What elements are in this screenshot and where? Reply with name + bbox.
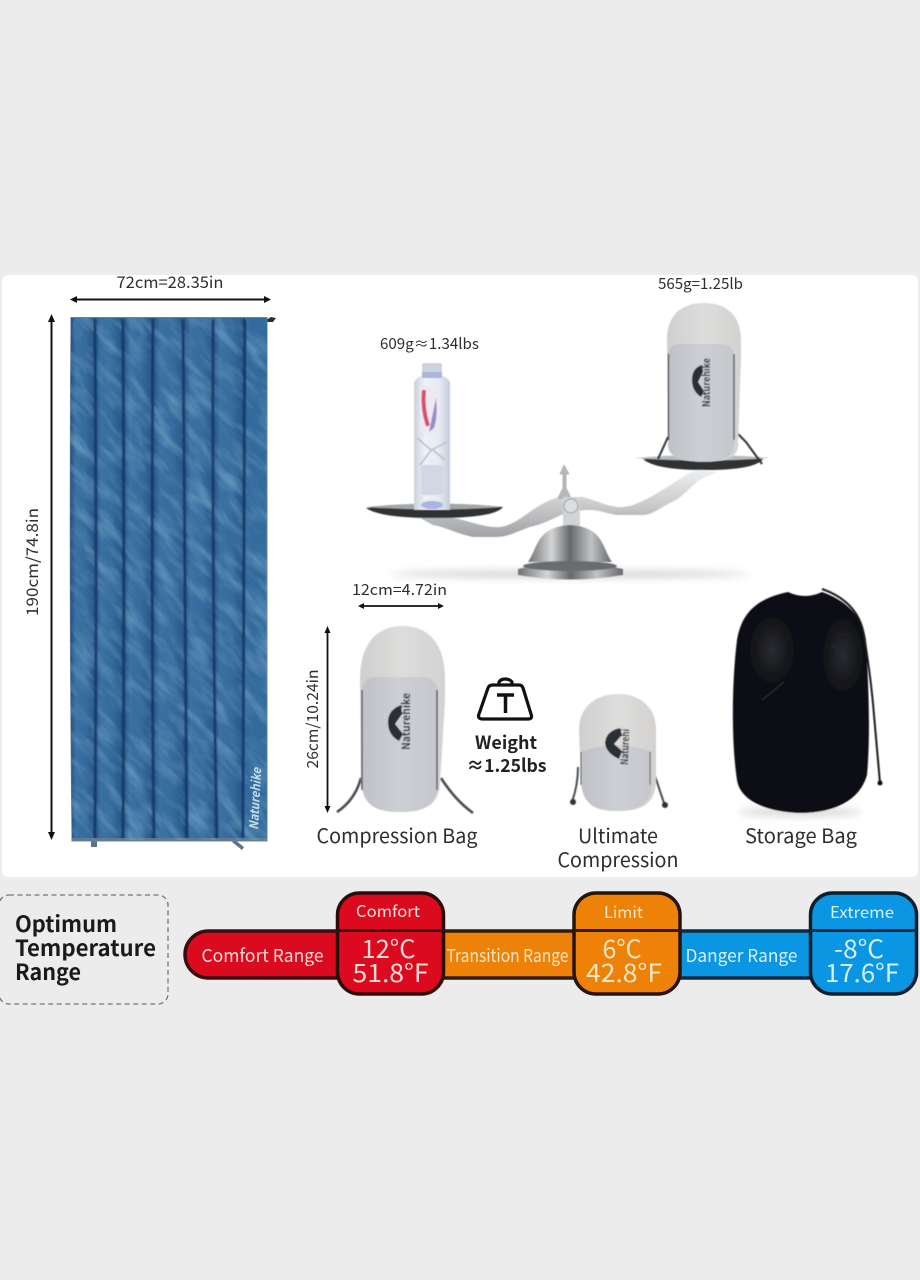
label: bag weight: 565g=1.25lb bbox=[658, 273, 743, 294]
weight text: ≈1.25lbs bbox=[466, 752, 547, 778]
pillow pocket bbox=[73, 321, 83, 341]
weight text: Weight bbox=[475, 729, 537, 755]
panel: optimum temperature heading: Optimum bbox=[15, 907, 117, 939]
brand logo bbox=[692, 358, 714, 407]
comfort range bar: Comfort Range bbox=[202, 942, 324, 968]
pointer bbox=[558, 465, 571, 498]
comfort box bbox=[337, 893, 444, 994]
storage bag bbox=[733, 589, 882, 817]
seams bbox=[95, 320, 245, 838]
temperature range chart bbox=[185, 893, 917, 994]
extreme box: Extreme bbox=[830, 899, 894, 923]
weight text bbox=[466, 729, 547, 778]
stuff sack on scale bbox=[658, 303, 762, 464]
transition range bar bbox=[440, 931, 576, 978]
extreme box: 17.6°F bbox=[825, 954, 899, 990]
brand logo bbox=[388, 693, 414, 750]
label: compressed height: 26cm/10.24in bbox=[301, 670, 323, 768]
limit box: 42.8°F bbox=[586, 954, 662, 990]
limit box: 6°C bbox=[602, 930, 642, 966]
left plate bbox=[366, 504, 503, 518]
transition range bar: Transition Range bbox=[446, 942, 569, 968]
panel: optimum temperature heading: Temperature bbox=[15, 931, 156, 963]
limit box: Limit bbox=[604, 899, 643, 923]
label: ultimate compression: Compression bbox=[558, 844, 678, 873]
bell stand bbox=[563, 497, 580, 530]
height dimension: sleeping bag: 190cm/74.8in bbox=[19, 508, 43, 616]
label: compressed width bbox=[352, 579, 447, 609]
brand logo: Naturehike bbox=[699, 358, 714, 407]
brand text on bag: Naturehike bbox=[243, 766, 265, 830]
label: storage bag: Storage Bag bbox=[745, 820, 857, 849]
comfort box: 51.8°F bbox=[352, 954, 429, 990]
extreme box bbox=[810, 893, 917, 994]
brand logo: Naturehike bbox=[398, 693, 414, 750]
width dimension: sleeping bag bbox=[70, 269, 271, 303]
balance scale bbox=[366, 455, 770, 580]
label: compressed width: 12cm=4.72in bbox=[352, 579, 447, 600]
brand logo: Naturehi bbox=[617, 729, 633, 765]
danger range bar bbox=[678, 931, 812, 978]
limit box bbox=[574, 893, 681, 994]
label: ultimate compression: Ultimate bbox=[578, 820, 658, 849]
height dimension: sleeping bag bbox=[19, 314, 55, 840]
label: compression bag: Compression Bag bbox=[316, 820, 478, 849]
panel: optimum temperature heading: Range bbox=[15, 955, 81, 987]
panel: optimum temperature heading bbox=[0, 895, 168, 1004]
fabric texture bbox=[70, 318, 267, 840]
comfort box: 12°C bbox=[362, 930, 416, 966]
ultimate compression bag bbox=[570, 694, 668, 811]
comfort box: Comfort bbox=[356, 898, 420, 922]
label: compressed height bbox=[301, 626, 330, 813]
width dimension: sleeping bag: 72cm=28.35in bbox=[116, 269, 224, 293]
sleeping bag bbox=[70, 317, 276, 850]
label: bottle weight: 609g≈1.34lbs bbox=[380, 333, 479, 354]
extreme box: -8°C bbox=[834, 930, 884, 966]
compression bag bbox=[337, 626, 473, 813]
icon: weight bbox=[478, 679, 532, 719]
right plate bbox=[643, 456, 763, 470]
comfort range bar bbox=[185, 931, 340, 978]
fabric highlights bbox=[748, 614, 865, 700]
panel: product details bbox=[2, 275, 918, 877]
label: ultimate compression bbox=[558, 820, 678, 873]
water bottle bbox=[414, 363, 450, 510]
scale beam bbox=[420, 470, 717, 537]
danger range bar: Danger Range bbox=[686, 942, 798, 968]
bottle label bbox=[420, 386, 440, 433]
